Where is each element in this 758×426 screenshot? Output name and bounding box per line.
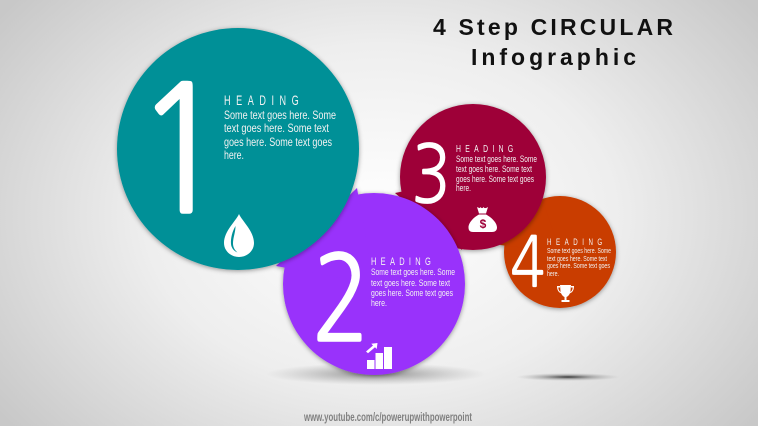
footer url: www.youtube.com/c/powerupwithpowerpoint bbox=[303, 412, 472, 424]
icon: money bag bbox=[468, 207, 497, 232]
step 2 number: 2 bbox=[312, 240, 370, 358]
step 1 text: Some text goes here. Some bbox=[224, 108, 336, 122]
step 4 number: 4 bbox=[510, 229, 545, 297]
step 2 text: Some text goes here. Some bbox=[371, 267, 455, 278]
panel: step 4 bbox=[500, 195, 616, 308]
step 1 circle bbox=[117, 28, 359, 270]
panel: step 3 bbox=[395, 104, 546, 250]
title bbox=[433, 14, 673, 70]
icon: growth chart bbox=[366, 343, 392, 369]
icon: water drop bbox=[224, 214, 254, 257]
title: 4 Step CIRCULAR bbox=[433, 14, 673, 40]
step 2 text: here. bbox=[371, 298, 387, 309]
ground shadow: right bbox=[516, 373, 620, 381]
step 4 text: Some text goes here. Some bbox=[547, 246, 611, 255]
step 2 text: text goes here. Some text bbox=[371, 278, 450, 289]
step 3 text: text goes here. Some text bbox=[456, 164, 532, 174]
step 4 heading: HEADING bbox=[547, 237, 602, 247]
panel: step 1 bbox=[117, 28, 359, 270]
step 2 heading: HEADING bbox=[371, 256, 431, 269]
step 1 text: goes here. Some text goes bbox=[224, 135, 332, 149]
step 3 text: Some text goes here. Some bbox=[456, 154, 537, 164]
ground shadow: left bbox=[266, 363, 486, 385]
step 2 text bbox=[371, 267, 455, 309]
icon: trophy bbox=[557, 285, 574, 302]
step 1 text: text goes here. Some text bbox=[224, 121, 330, 135]
step 4 circle bbox=[500, 195, 616, 308]
step 1 number: 1 bbox=[134, 62, 229, 237]
step 3 text: here. bbox=[456, 183, 471, 193]
step 3 text: goes here. Some text goes bbox=[456, 174, 534, 184]
step 2 circle bbox=[276, 188, 465, 375]
step 3 text bbox=[456, 154, 537, 193]
step 1 text: here. bbox=[224, 148, 244, 162]
step 4 text bbox=[547, 246, 611, 278]
step 3 heading: HEADING bbox=[456, 143, 513, 154]
step 3 circle bbox=[395, 104, 546, 250]
step 1 text bbox=[224, 108, 336, 162]
panel: step 2 bbox=[276, 188, 465, 375]
step 3 number: 3 bbox=[412, 135, 451, 215]
step 4 text: here. bbox=[547, 269, 559, 278]
icon: money bag: $ bbox=[480, 217, 487, 231]
step 1 heading: HEADING bbox=[224, 92, 299, 109]
step 4 text: goes here. Some text goes bbox=[547, 261, 610, 270]
title: Infographic bbox=[471, 44, 636, 70]
step 4 text: text goes here. Some text bbox=[547, 254, 608, 263]
step 2 text: goes here. Some text goes bbox=[371, 288, 453, 299]
